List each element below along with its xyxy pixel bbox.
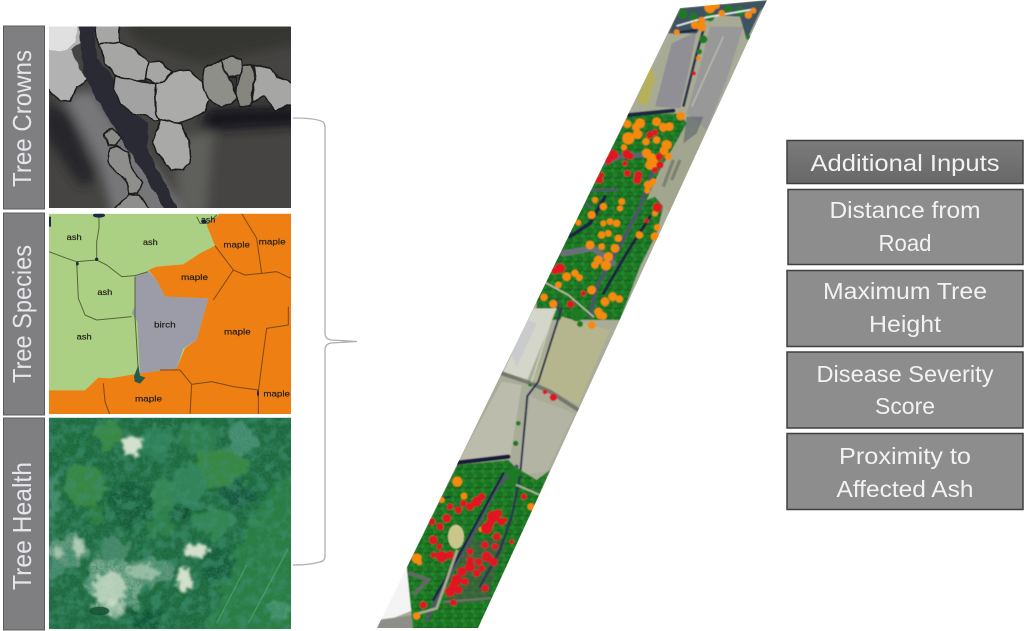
upper section: meadow and northern canopy bbox=[537, 0, 770, 320]
box: Maximum Tree Height bbox=[787, 270, 1023, 346]
species text labels: maple bbox=[181, 272, 208, 282]
box: Distance from Road bbox=[788, 190, 1023, 264]
label: Tree Species: Tree Species bbox=[7, 245, 37, 383]
species text labels: maple bbox=[259, 236, 286, 246]
box: Proximity to Affected Ash: Affected Ash bbox=[836, 476, 974, 502]
panel: tree health aerial image bbox=[48, 418, 300, 631]
tree crown outlines bbox=[47, 23, 293, 213]
label: Tree Health bbox=[4, 418, 44, 630]
panel: tree crowns image bbox=[49, 26, 291, 208]
box: Maximum Tree Height: Height bbox=[869, 311, 942, 337]
label: Tree Crowns bbox=[4, 26, 44, 209]
box: Disease Severity Score: Score bbox=[875, 393, 935, 419]
species text labels: ash bbox=[97, 287, 113, 297]
box: Proximity to Affected Ash: Proximity to bbox=[839, 443, 971, 469]
dead canopy highlights bbox=[49, 436, 209, 618]
lower section: fields and southern canopy bbox=[363, 308, 610, 631]
panel: tree species map bbox=[49, 213, 291, 415]
orange trees, north bbox=[541, 3, 755, 319]
species text labels: ash bbox=[201, 214, 216, 224]
species text labels: birch bbox=[154, 320, 176, 330]
species text labels: maple bbox=[224, 326, 251, 336]
species text labels: ash bbox=[77, 332, 92, 342]
bracket connecting panels to map bbox=[293, 118, 357, 565]
red trees, north bbox=[552, 72, 695, 307]
label: Tree Crowns: Tree Crowns bbox=[7, 50, 37, 187]
box: Additional Inputs heading: Additional Inputs bbox=[810, 150, 1000, 176]
species text labels: maple bbox=[223, 240, 250, 250]
box: Distance from Road: Distance from bbox=[830, 197, 980, 223]
label: Tree Health: Tree Health bbox=[7, 462, 37, 590]
box: Disease Severity Score: Disease Severity bbox=[816, 361, 994, 387]
species text labels: ash bbox=[143, 237, 158, 247]
species text labels: ash bbox=[67, 232, 82, 242]
species text labels: maple bbox=[135, 394, 162, 404]
box: Proximity to Affected Ash bbox=[787, 434, 1023, 510]
box: Distance from Road: Road bbox=[878, 230, 932, 256]
box: Additional Inputs heading bbox=[787, 140, 1023, 184]
species text labels bbox=[67, 214, 290, 404]
diagonal aerial map strip bbox=[363, 0, 770, 631]
box: Maximum Tree Height: Maximum Tree bbox=[823, 278, 987, 304]
label: Tree Species bbox=[4, 213, 44, 415]
species text labels: maple bbox=[263, 389, 290, 399]
orange trees, south bbox=[413, 312, 603, 619]
red trees, south bbox=[421, 391, 556, 608]
clearing bbox=[448, 525, 464, 549]
box: Disease Severity Score bbox=[787, 352, 1023, 428]
